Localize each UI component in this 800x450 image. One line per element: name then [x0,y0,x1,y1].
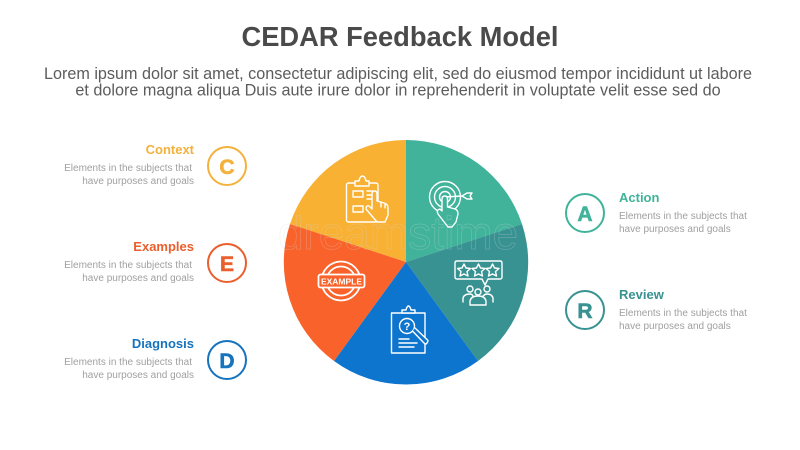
heading: Action [619,190,660,205]
intro text [44,65,752,100]
badge: A: A [577,203,593,226]
badge: R: R [577,300,593,323]
intro text: et dolore magna aliqua Duis aute irure dolor in reprehenderit in voluptate velit esse sed do [75,82,721,100]
badge: E: E [220,253,234,276]
icon: report with magnifier [392,306,428,353]
item: diagnosis [64,336,246,381]
icon: report with magnifier: ? [404,321,411,333]
description [619,211,747,235]
icon: target with hand [430,182,472,227]
heading: Diagnosis [132,336,194,351]
badge: C: C [219,156,235,179]
segment: examples [284,224,406,361]
heading: Context [146,142,195,157]
icon: example stamp: EXAMPLE [321,276,362,286]
badge: C [208,147,246,185]
heading: Review [619,287,665,302]
pie chart [284,140,528,385]
icon: clipboard with hand [346,176,388,222]
item: context [64,142,246,187]
icon: rating stars and people [455,261,502,305]
description [64,163,194,187]
description: Elements in the subjects that [64,357,192,368]
intro text: Lorem ipsum dolor sit amet, consectetur adipiscing elit, sed do eiusmod tempor incididunt ut labore [44,65,752,83]
description: have purposes and goals [82,370,194,381]
badge: D [208,341,246,379]
description [64,260,194,284]
icon: example stamp [318,262,364,300]
badge: E [208,244,246,282]
description [64,357,194,381]
badge: D: D [219,350,235,373]
segment: context [290,140,406,262]
description: Elements in the subjects that [64,163,192,174]
watermark: dreamstime [278,207,518,259]
description [619,308,747,332]
segment: action [406,140,522,262]
item: action [566,190,747,235]
description: Elements in the subjects that [64,260,192,271]
description: Elements in the subjects that [619,308,747,319]
badge: R [566,291,604,329]
description: have purposes and goals [82,273,194,284]
heading: Examples [133,239,194,254]
description: have purposes and goals [619,321,731,332]
badge: A [566,194,604,232]
title: CEDAR Feedback Model [241,21,559,52]
segment: review [406,224,528,361]
description: Elements in the subjects that [619,211,747,222]
item: review [566,287,747,332]
description: have purposes and goals [619,224,731,235]
description: have purposes and goals [82,176,194,187]
item: examples [64,239,246,284]
segment: diagnosis [334,262,478,385]
